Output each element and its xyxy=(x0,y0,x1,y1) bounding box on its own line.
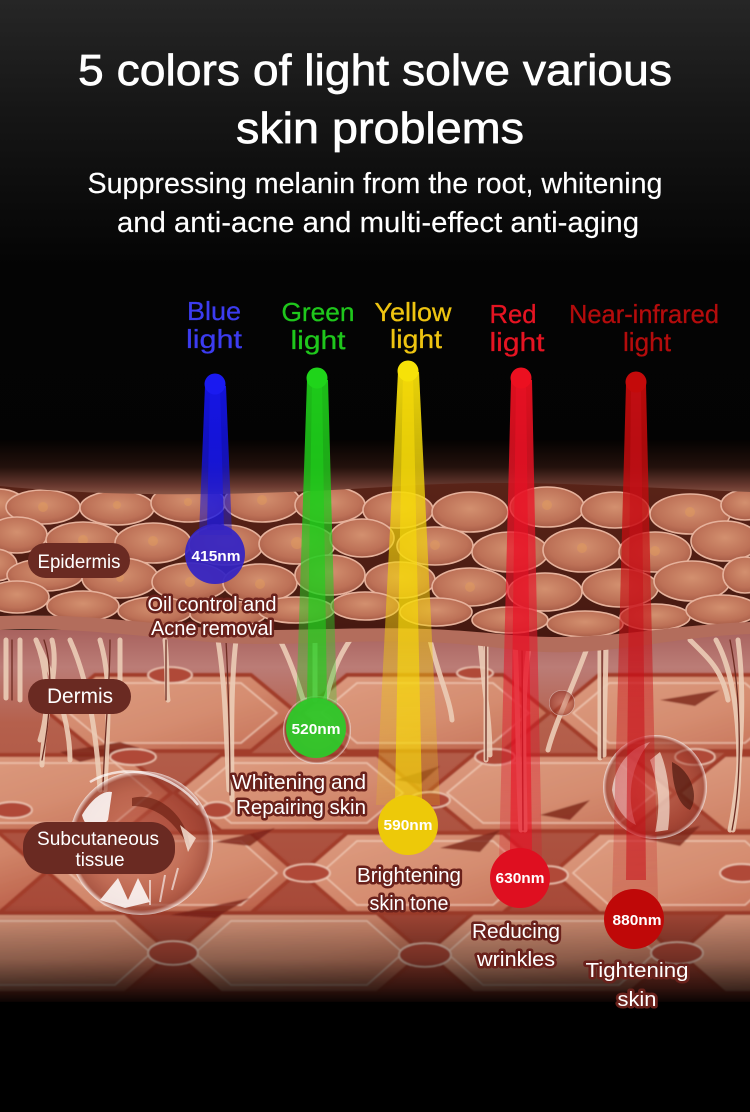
effect: Reducing wrinkles: Reducing xyxy=(472,921,560,943)
pill: Dermis: Dermis xyxy=(47,685,113,708)
label: Yellow light: light xyxy=(390,324,443,354)
effect: Tightening skin: Tightening xyxy=(586,960,688,982)
glass sphere: left xyxy=(69,771,213,915)
beam: red light xyxy=(499,368,542,860)
beam: blue light xyxy=(199,374,232,535)
hair follicle strands xyxy=(6,640,742,830)
pill: Dermis xyxy=(28,679,131,714)
label: Near-infrared light: light xyxy=(623,327,672,357)
subtitle: Suppressing melanin from the root, whitening xyxy=(88,168,662,200)
node: 590nm: 590nm xyxy=(384,817,432,834)
effect: Whitening and Repairing skin xyxy=(232,772,366,819)
node: 630nm xyxy=(490,848,550,908)
epidermis cell layer background xyxy=(0,475,750,643)
node: 880nm xyxy=(604,889,664,949)
label: Blue light xyxy=(186,296,243,354)
beam: green light xyxy=(296,368,337,710)
label: Red light xyxy=(490,299,545,357)
effect: Oil control and Acne removal xyxy=(148,594,276,640)
effect: Brightening skin tone: skin tone xyxy=(370,893,448,915)
pill: Epidermis xyxy=(28,543,130,578)
effect: Whitening and Repairing skin: Whitening and xyxy=(232,772,366,794)
label: Red light: light xyxy=(490,327,545,357)
effect: Reducing wrinkles xyxy=(472,921,560,971)
node: 520nm: 520nm xyxy=(292,721,340,738)
label: Blue light: light xyxy=(186,324,243,354)
subtitle: and anti-acne and multi-effect anti-aging xyxy=(117,207,639,239)
label: Red light: Red xyxy=(490,299,536,329)
dermis and subcutaneous base xyxy=(0,630,750,1002)
effect: Whitening and Repairing skin: Repairing skin xyxy=(236,797,366,819)
skin surface band xyxy=(0,440,750,494)
pill: Subcutaneous tissue: tissue xyxy=(76,850,124,871)
node: 415nm xyxy=(185,524,245,584)
pill: Subcutaneous tissue: Subcutaneous xyxy=(37,829,159,850)
epidermis lower membrane xyxy=(0,615,750,652)
effect: Tightening skin: skin xyxy=(618,989,656,1011)
effect: Tightening skin xyxy=(586,960,688,1011)
node: 520nm xyxy=(286,698,346,758)
label: Blue light: Blue xyxy=(187,296,241,326)
label: Near-infrared light: Near-infrared xyxy=(569,299,719,329)
pill: Subcutaneous tissue xyxy=(23,822,175,874)
glass sphere: behind 520nm xyxy=(283,696,351,764)
label: Green light: Green xyxy=(282,297,354,327)
node: 590nm xyxy=(378,795,438,855)
label: Yellow light: Yellow xyxy=(374,297,452,327)
node: 630nm: 630nm xyxy=(496,870,544,887)
bottom fade to black xyxy=(0,905,750,1003)
subtitle xyxy=(88,168,662,239)
effect: Reducing wrinkles: wrinkles xyxy=(476,949,555,971)
beam: near-infrared light xyxy=(612,372,658,900)
panel: hexagonal fat cells xyxy=(0,667,750,993)
label: Yellow light xyxy=(374,297,452,354)
panel: epidermis cells xyxy=(0,482,750,637)
effect: Oil control and Acne removal: Oil control and xyxy=(148,594,276,616)
effect: Brightening skin tone: Brightening xyxy=(357,865,461,887)
node: 415nm: 415nm xyxy=(192,548,240,565)
effect: Brightening skin tone xyxy=(357,865,461,915)
label: Green light xyxy=(282,297,354,355)
label: Near-infrared light xyxy=(569,299,719,357)
pill: Epidermis: Epidermis xyxy=(38,552,120,573)
glass sphere: right xyxy=(603,735,707,839)
node: 880nm: 880nm xyxy=(612,912,662,929)
skin cross-section xyxy=(0,440,750,1003)
title: 5 colors of light solve various xyxy=(78,46,672,95)
effect: Oil control and Acne removal: Acne removal xyxy=(151,618,273,640)
label: Green light: light xyxy=(290,325,346,355)
title: skin problems xyxy=(236,104,524,153)
title xyxy=(78,46,672,153)
beam: yellow light xyxy=(376,360,440,805)
glass sphere: small xyxy=(549,690,575,716)
